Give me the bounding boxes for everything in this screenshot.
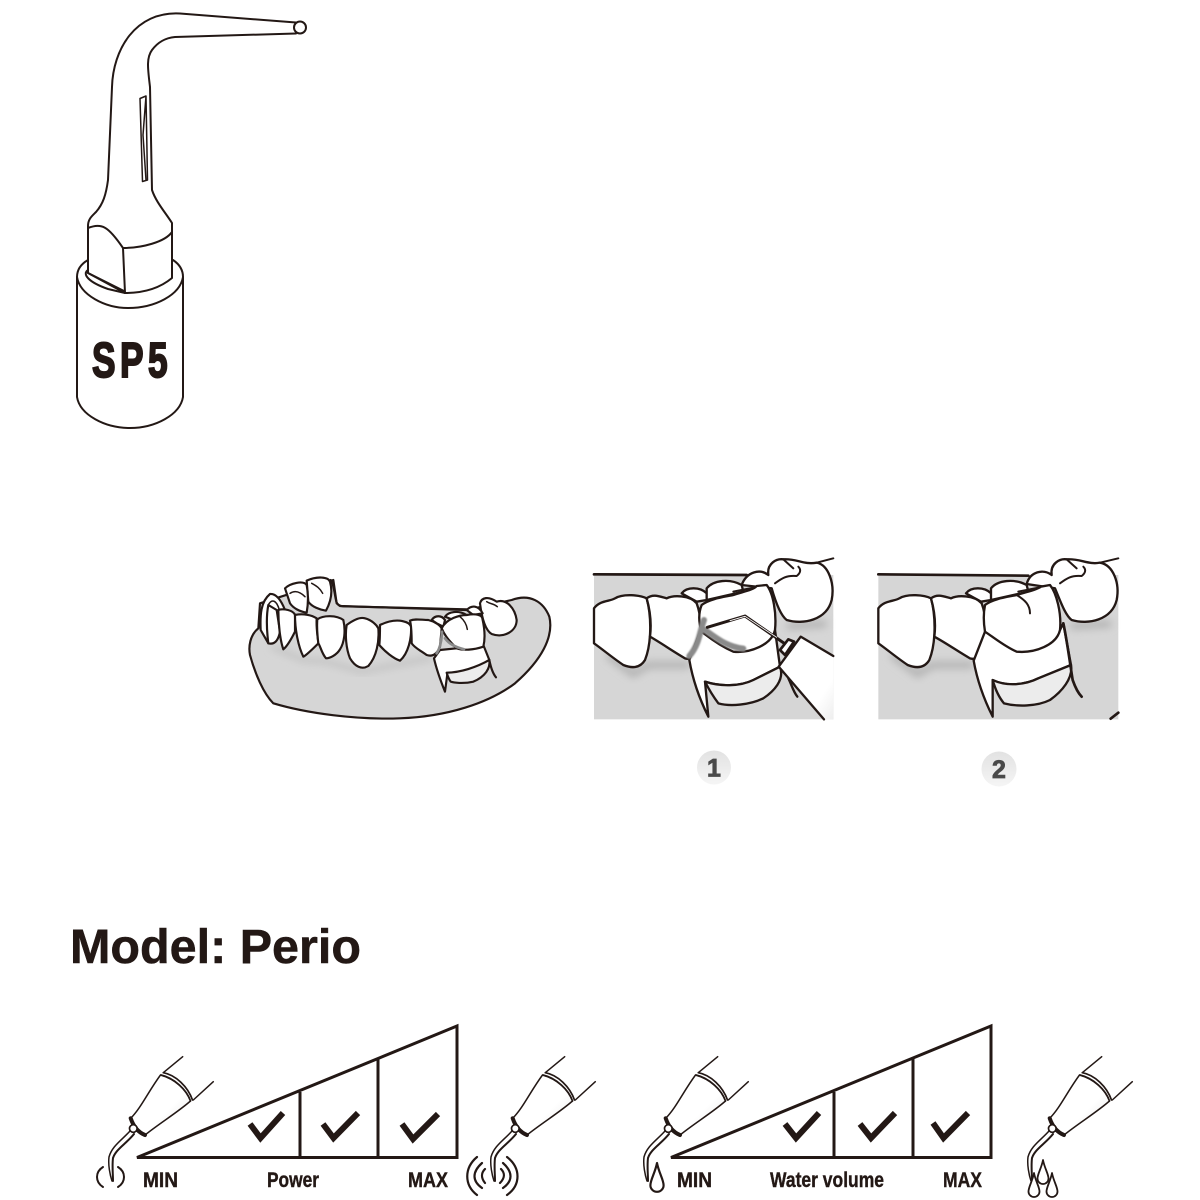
collar top	[77, 260, 183, 308]
high vibration arcs	[467, 1157, 518, 1195]
single water drop	[650, 1163, 664, 1192]
tooth shadows	[894, 624, 1108, 674]
icon: handpiece at low water	[644, 1057, 748, 1192]
back right molars	[1027, 559, 1118, 622]
tooth shadows	[610, 624, 823, 674]
title: Model: Perio	[70, 921, 361, 974]
scaler collar	[780, 639, 794, 655]
rear right teeth	[480, 598, 517, 635]
corner mark	[1111, 713, 1118, 719]
power scale labels: Power	[267, 1169, 319, 1192]
top gum line	[594, 570, 747, 579]
icon: handpiece at high power	[467, 1057, 595, 1195]
badge: step 2	[982, 752, 1016, 786]
handpiece	[779, 637, 833, 719]
water triangle chart	[671, 1026, 991, 1158]
power scale labels: MIN	[143, 1169, 178, 1192]
tip shaft outline	[88, 13, 296, 293]
scaler tip	[707, 616, 787, 645]
top gum line	[878, 574, 1028, 576]
grey background	[878, 575, 1118, 719]
water scale labels: MIN	[677, 1169, 712, 1192]
second tooth	[647, 596, 701, 659]
panel: step 2 scene	[878, 558, 1118, 719]
treated tooth	[699, 585, 775, 652]
badge: step 1: 1	[707, 754, 721, 782]
gum below treated tooth	[974, 623, 1071, 717]
collar cylinder	[77, 277, 183, 428]
three water drops	[1028, 1160, 1058, 1197]
panel: step 1 scene	[594, 558, 833, 719]
power scale labels: MAX	[408, 1169, 448, 1192]
residual stain	[437, 632, 464, 653]
back right molars	[742, 559, 833, 622]
panel: water volume scale	[671, 1026, 991, 1192]
water scale labels: Water volume	[770, 1169, 884, 1192]
groove in shaft	[140, 96, 148, 182]
icon: handpiece at high water	[1028, 1057, 1132, 1197]
tip end ring	[294, 22, 306, 34]
hex facets	[88, 226, 172, 293]
grey background	[594, 575, 833, 719]
second tooth	[931, 596, 986, 659]
upper gum line	[331, 580, 467, 609]
tooth shadows	[273, 647, 430, 672]
jaw illustration	[249, 578, 550, 719]
gum around treated tooth	[434, 645, 489, 692]
power triangle chart	[137, 1026, 457, 1158]
panel: power scale	[137, 1026, 457, 1192]
water check marks	[785, 1113, 968, 1138]
treated tooth	[442, 614, 484, 650]
icon: handpiece at low power	[97, 1057, 213, 1187]
residual stain	[689, 620, 743, 656]
gum	[249, 580, 550, 719]
water scale labels	[677, 1169, 982, 1192]
badge: step 1	[697, 750, 731, 784]
lower teeth row	[267, 605, 280, 644]
low vibration arcs	[97, 1167, 124, 1187]
power scale labels	[143, 1169, 448, 1192]
water scale labels: MAX	[943, 1169, 982, 1192]
badge: step 2: 2	[992, 756, 1006, 784]
leftmost tooth	[878, 595, 935, 667]
tip illustration: SP5	[77, 13, 306, 428]
treated tooth	[984, 585, 1060, 652]
model code SP5: SP5	[92, 333, 168, 388]
leftmost tooth	[594, 595, 650, 667]
gum below treated tooth	[689, 630, 780, 717]
power check marks	[250, 1113, 438, 1139]
rear left teeth	[260, 578, 331, 643]
